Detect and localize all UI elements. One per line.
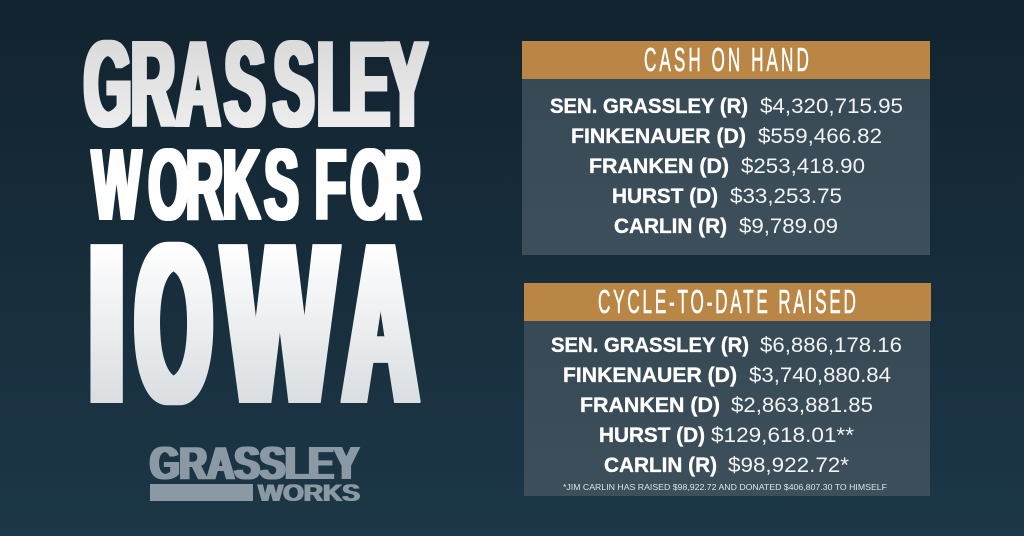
row: Finkenauer — [571, 125, 882, 148]
row: Sen. Grassley: SEN. GRASSLEY (R) — [551, 334, 749, 357]
logo wordmark: GRASSLEY: GRASSLEY — [150, 437, 359, 489]
row: Finkenauer — [563, 364, 891, 387]
row: Sen. Grassley — [550, 95, 903, 118]
row: Carlin: CARLIN (R) — [614, 215, 727, 238]
panel heading: CYCLE-TO-DATE RAISED — [598, 283, 856, 321]
panel: cash on hand — [522, 41, 930, 255]
logo bar — [150, 484, 253, 501]
row: Carlin: CARLIN (R) — [604, 454, 717, 477]
row: Finkenauer: FINKENAUER (D) — [571, 125, 746, 148]
row: Hurst: HURST (D) — [599, 424, 705, 447]
panel background — [522, 41, 930, 255]
row: Franken — [589, 155, 865, 178]
row: Franken: $2,863,881.85 — [731, 394, 873, 417]
row: Carlin: $98,922.72* — [728, 454, 849, 477]
logo wordmark: WORKS: WORKS — [258, 480, 360, 507]
title line: IOWA: I — [87, 197, 126, 451]
panel header bar — [524, 283, 931, 321]
title line: GRASSLEY: GRASSLEY — [84, 17, 427, 153]
footnote: *JIM CARLIN HAS RAISED $98,922.72 AND DONATED $406,807.30 TO HIMSELF — [563, 482, 887, 492]
row: Carlin: $9,789.09 — [739, 215, 838, 238]
row: Sen. Grassley: $6,886,178.16 — [760, 334, 902, 357]
panel heading: CASH ON HAND — [644, 41, 809, 79]
row: Sen. Grassley: SEN. GRASSLEY (R) — [550, 95, 748, 118]
row: Hurst: HURST (D) — [612, 185, 718, 208]
row: Hurst: $33,253.75 — [730, 185, 842, 208]
row: Sen. Grassley — [551, 334, 902, 357]
title line: IOWA: W — [224, 197, 336, 451]
row: Finkenauer: $3,740,880.84 — [749, 364, 891, 387]
row: Finkenauer: $559,466.82 — [758, 125, 882, 148]
row: Hurst — [599, 424, 854, 447]
row: Franken: FRANKEN (D) — [580, 394, 720, 417]
row: Hurst — [612, 185, 842, 208]
row: Franken: $253,418.90 — [741, 155, 865, 178]
title: Grassley Works for Iowa — [84, 17, 430, 406]
title line: IOWA: A — [344, 197, 417, 451]
row: Carlin — [614, 215, 838, 238]
title line: WORKS FOR: WORKS FOR — [92, 129, 421, 240]
row: Finkenauer: FINKENAUER (D) — [563, 364, 737, 387]
row: Carlin — [604, 454, 849, 477]
row: Sen. Grassley: $4,320,715.95 — [760, 95, 903, 118]
row: Franken: FRANKEN (D) — [589, 155, 729, 178]
row: Franken — [580, 394, 873, 417]
logo: Grassley Works — [150, 437, 360, 507]
panel header bar — [522, 41, 930, 79]
panel: cycle-to-date raised — [524, 283, 931, 496]
title line: IOWA — [90, 242, 421, 406]
panel background — [524, 283, 930, 496]
row: Hurst: $129,618.01** — [711, 424, 854, 447]
title line: IOWA: O — [136, 197, 211, 451]
